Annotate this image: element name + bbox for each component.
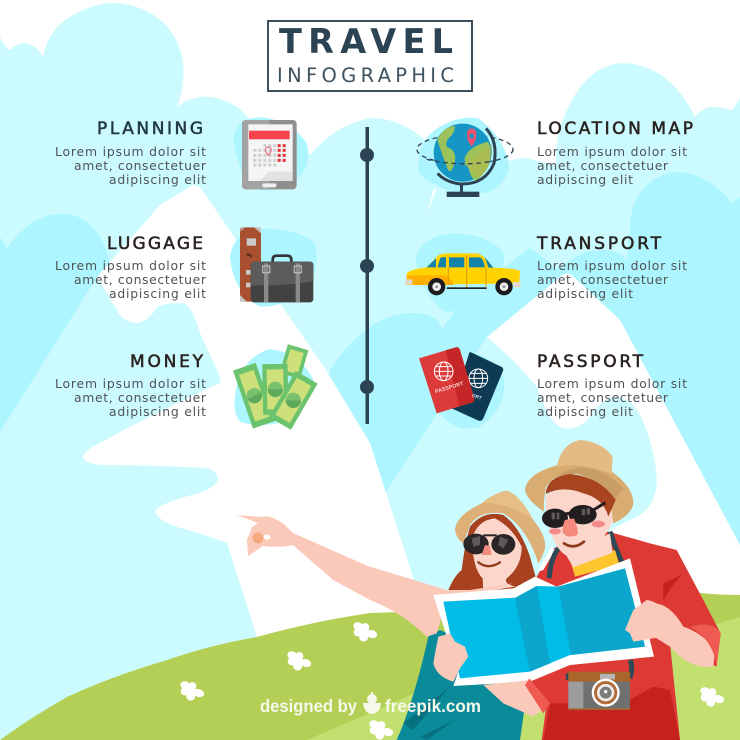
- text: location map: amet, consectetuer: [537, 158, 669, 173]
- text: passport: [537, 352, 687, 419]
- woman: dress: [397, 630, 530, 740]
- icon: passports: [419, 347, 505, 429]
- text: transport: adipiscing elit: [537, 286, 633, 301]
- man: shirt: [523, 532, 721, 740]
- woman: raised arm: [370, 567, 513, 637]
- text: location map: LOCATION MAP: [537, 119, 693, 139]
- woman: nose: [482, 545, 492, 555]
- man: neck: [565, 533, 613, 567]
- text: planning: amet, consectetuer: [74, 158, 207, 173]
- woman's pointing hand: [237, 515, 370, 600]
- man: sleeve cuff: [690, 624, 721, 667]
- title box: TRAVEL: [279, 22, 453, 61]
- text: planning: [55, 119, 207, 187]
- man: camera strap: [549, 532, 632, 680]
- title box: INFOGRAPHIC: [277, 64, 454, 87]
- icon: tablet calendar: [233, 117, 308, 191]
- icon: passports: PASSPORT: [434, 381, 465, 395]
- icon: globe: [417, 118, 513, 197]
- title box: [268, 21, 472, 91]
- man: sunglasses: [542, 503, 605, 528]
- man: hat crown: [557, 440, 613, 474]
- man: hand: [625, 600, 668, 642]
- text: luggage: adipiscing elit: [109, 286, 206, 301]
- icon: taxi: [405, 234, 521, 312]
- grass hills: [0, 593, 740, 740]
- man: hat underside: [546, 467, 623, 500]
- text: passport: PASSPORT: [537, 352, 644, 372]
- man: cheeks: [549, 521, 605, 534]
- woman: smile: [478, 562, 500, 566]
- icon: money: [233, 344, 318, 430]
- icon: passports: ORT: [471, 393, 482, 401]
- man: hair: [546, 474, 616, 517]
- freepik credit: [260, 692, 481, 716]
- text: planning: Lorem ipsum dolor sit: [55, 144, 206, 159]
- text: planning: PLANNING: [97, 119, 203, 139]
- text: luggage: Lorem ipsum dolor sit: [55, 258, 206, 273]
- flowers: [177, 620, 726, 740]
- text: location map: adipiscing elit: [537, 172, 633, 187]
- text: money: [55, 352, 207, 419]
- man: nose: [562, 518, 578, 537]
- woman: hand: [433, 633, 468, 682]
- text: money: adipiscing elit: [109, 404, 206, 419]
- freepik credit: designed by: [260, 696, 357, 716]
- man: face: [546, 489, 616, 558]
- text: luggage: LUGGAGE: [107, 234, 203, 254]
- man: sleeve edge: [525, 678, 550, 713]
- text: passport: amet, consectetuer: [537, 390, 669, 405]
- man: smile: [564, 542, 584, 546]
- man: hat brim: [525, 464, 633, 523]
- camera: [568, 672, 630, 710]
- text: transport: amet, consectetuer: [537, 272, 669, 287]
- man: shirt shadow: [543, 575, 682, 740]
- text: luggage: amet, consectetuer: [74, 272, 207, 287]
- woman: hair: [447, 514, 538, 600]
- timeline: [360, 127, 374, 424]
- woman: face: [472, 518, 522, 592]
- text: passport: Lorem ipsum dolor sit: [537, 376, 687, 391]
- text: money: Lorem ipsum dolor sit: [55, 376, 206, 391]
- text: transport: [536, 234, 687, 301]
- text: location map: [537, 119, 693, 187]
- man: forearm: [643, 603, 715, 667]
- text: transport: Lorem ipsum dolor sit: [537, 258, 687, 273]
- woman: sunglasses: [463, 534, 515, 555]
- text: luggage: [55, 234, 207, 301]
- woman: lower arm: [483, 680, 550, 717]
- icon: luggage: [230, 227, 317, 307]
- text: transport: TRANSPORT: [536, 234, 662, 254]
- freepik credit: freepik.com: [385, 696, 481, 716]
- text: money: amet, consectetuer: [74, 390, 207, 405]
- text: money: MONEY: [130, 352, 204, 372]
- woman and man travellers: [370, 440, 721, 740]
- background gap between hair and collar: [538, 547, 555, 572]
- woman: hat: [455, 491, 545, 563]
- map: [433, 558, 654, 686]
- man: yellow undershirt: [572, 550, 619, 577]
- text: location map: Lorem ipsum dolor sit: [537, 144, 687, 159]
- text: passport: adipiscing elit: [537, 404, 633, 419]
- text: planning: adipiscing elit: [109, 172, 206, 187]
